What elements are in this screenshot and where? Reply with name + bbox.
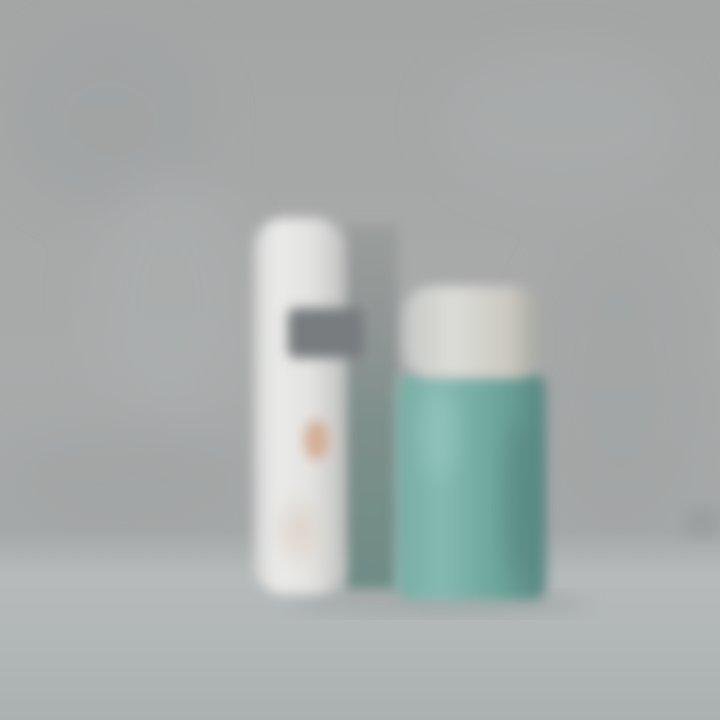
floor surface — [0, 530, 720, 720]
grey label band — [288, 308, 364, 358]
orange label mark — [304, 420, 330, 460]
teal jar — [396, 286, 546, 600]
small shadow at right edge — [686, 508, 718, 536]
wall mottling — [10, 30, 710, 530]
jar side shade — [502, 420, 538, 580]
shadow between the containers — [346, 225, 398, 590]
jar cap — [404, 286, 542, 378]
contact shadow — [290, 594, 590, 614]
jar body — [396, 374, 546, 600]
bottle body — [254, 218, 344, 594]
white bottle — [254, 218, 364, 594]
lower pale mark — [280, 502, 320, 558]
jar highlight — [418, 390, 458, 480]
